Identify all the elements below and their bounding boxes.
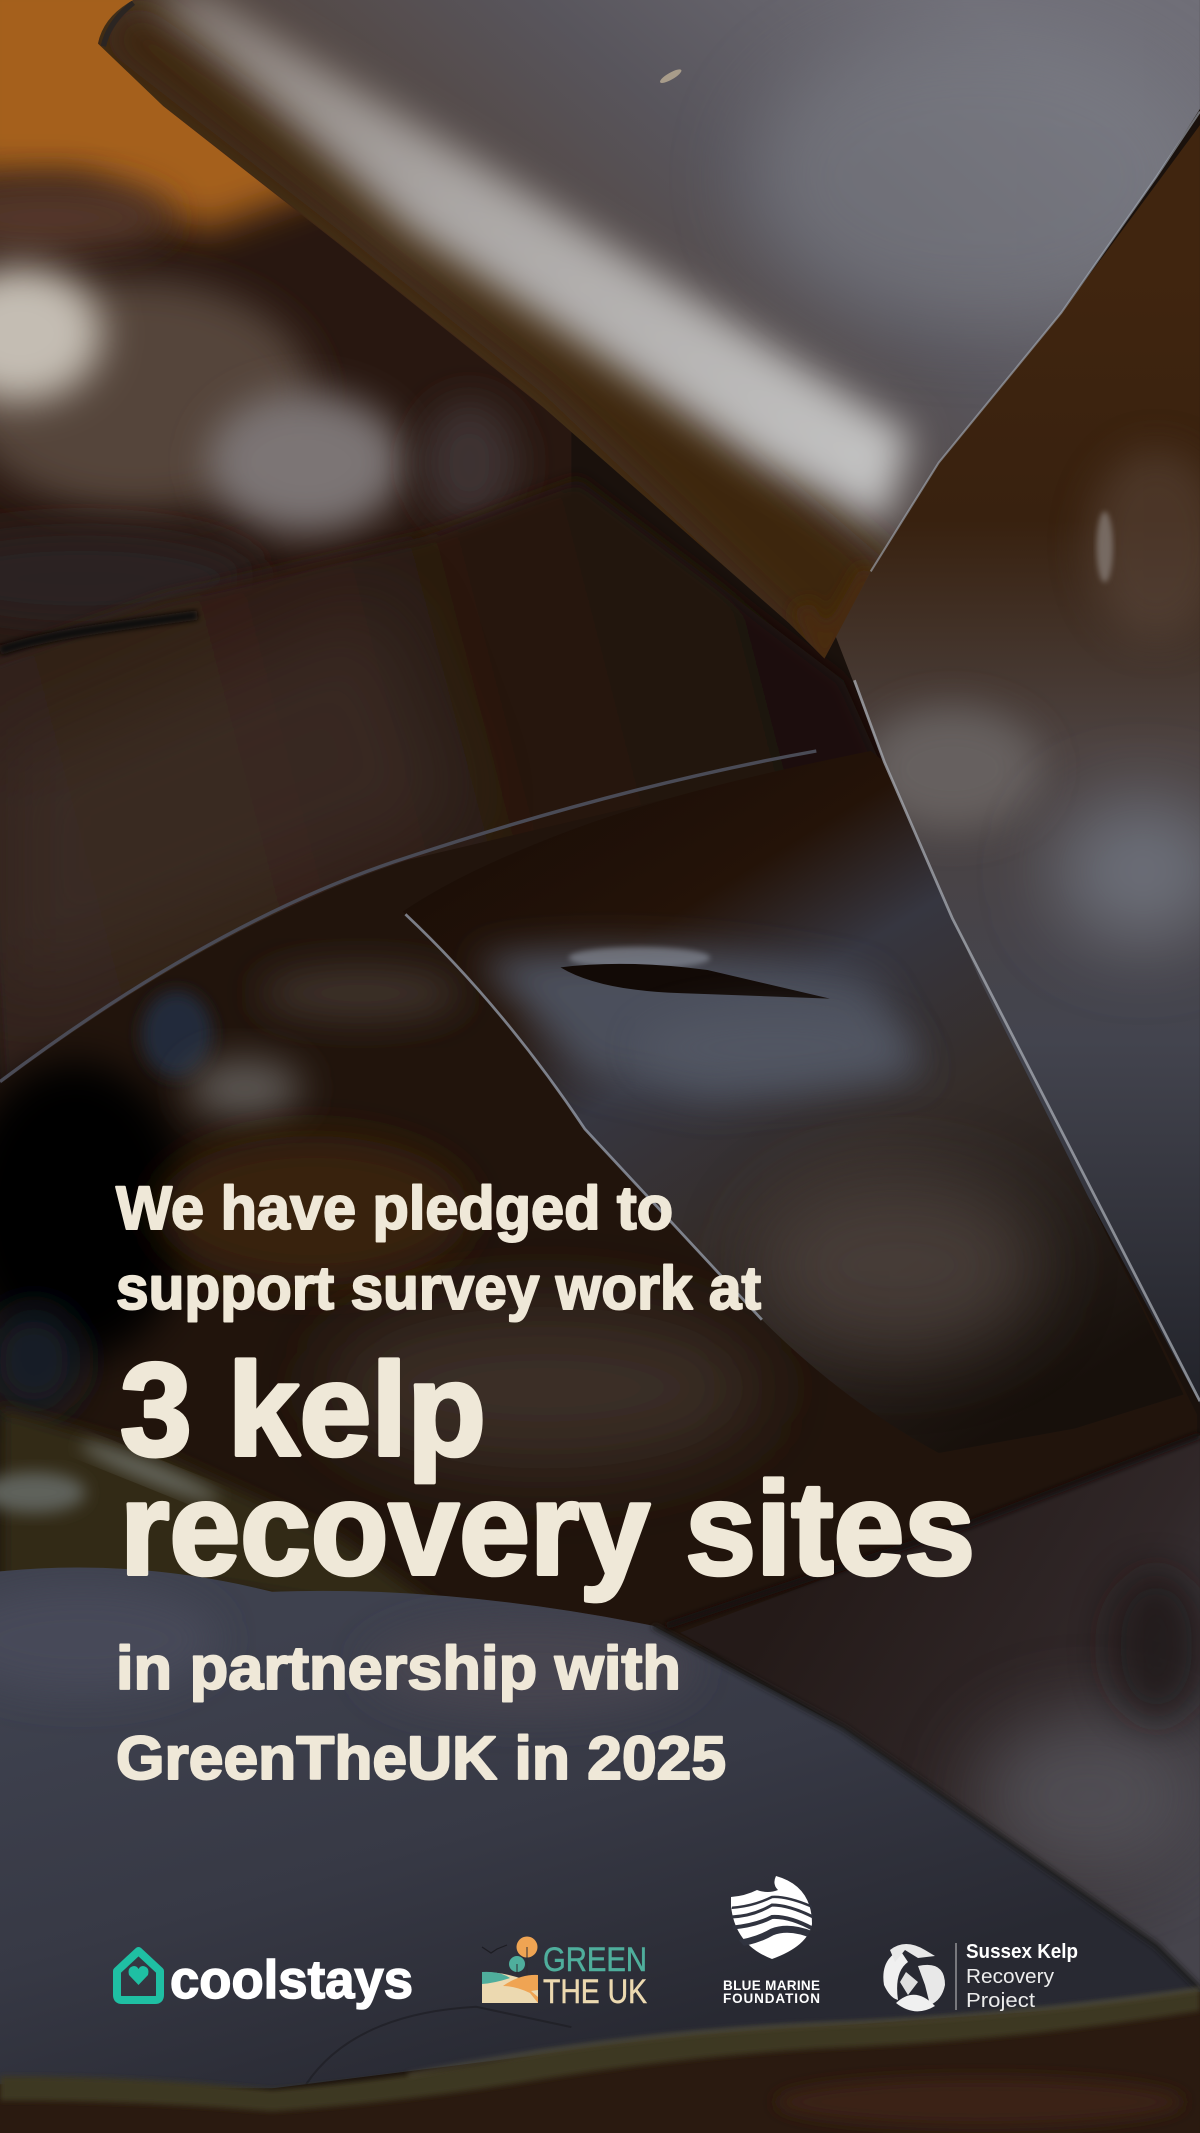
olive frond with highlight, left bbox=[0, 1408, 463, 1626]
wet edge of centre frond bbox=[405, 914, 762, 1320]
bright wet edge on top frond bbox=[871, 112, 1200, 571]
main headline bbox=[120, 1336, 975, 1602]
logo: Blue Marine Foundation bbox=[723, 1876, 820, 2006]
logo: Blue Marine Foundation: FOUNDATION bbox=[723, 1991, 820, 2006]
main headline: recovery sites bbox=[120, 1455, 975, 1602]
logo: Sussex Kelp Recovery Project: Recovery bbox=[966, 1965, 1055, 1988]
bright edge of right frond bbox=[854, 680, 1200, 1401]
intro text: support survey work at bbox=[116, 1254, 761, 1322]
lower right frond bbox=[680, 1436, 1200, 1989]
large blue-grey frond at the bottom bbox=[0, 1551, 1200, 2095]
out of focus background at top left bbox=[0, 0, 571, 707]
logo: Green the UK bbox=[482, 1936, 647, 2011]
frond edge line bbox=[0, 751, 816, 1082]
logo: Green the UK: GREEN bbox=[543, 1941, 647, 1979]
logo: Sussex Kelp Recovery Project: Sussex Kelp bbox=[966, 1940, 1078, 1963]
logo: Sussex Kelp Recovery Project bbox=[883, 1940, 1078, 2012]
partnership text: GreenTheUK in 2025 bbox=[116, 1724, 726, 1792]
main headline: 3 kelp bbox=[120, 1336, 486, 1483]
dark line between fronds bbox=[653, 1626, 1200, 1989]
kelp frond: centre left brown bbox=[0, 479, 898, 1102]
logo: coolstays: coolstays bbox=[170, 1950, 413, 2010]
kelp frond: wet centre bbox=[448, 753, 1184, 1452]
partnership text: in partnership with bbox=[116, 1634, 681, 1702]
olive strip at the very bottom bbox=[0, 1989, 1200, 2133]
logo: Blue Marine Foundation: BLUE MARINE bbox=[723, 1978, 820, 1993]
logo: Sussex Kelp Recovery Project: Project bbox=[966, 1989, 1035, 2012]
logo: Green the UK: THE UK bbox=[543, 1973, 647, 2011]
intro text bbox=[116, 1174, 761, 1322]
intro text: We have pledged to bbox=[116, 1174, 673, 1242]
partnership text bbox=[116, 1634, 726, 1792]
kelp frond: top, with bright highlight bbox=[0, 0, 1200, 667]
area under the frond, lower left bbox=[0, 751, 1197, 1646]
kelp frond: right side bbox=[816, 82, 1200, 1415]
